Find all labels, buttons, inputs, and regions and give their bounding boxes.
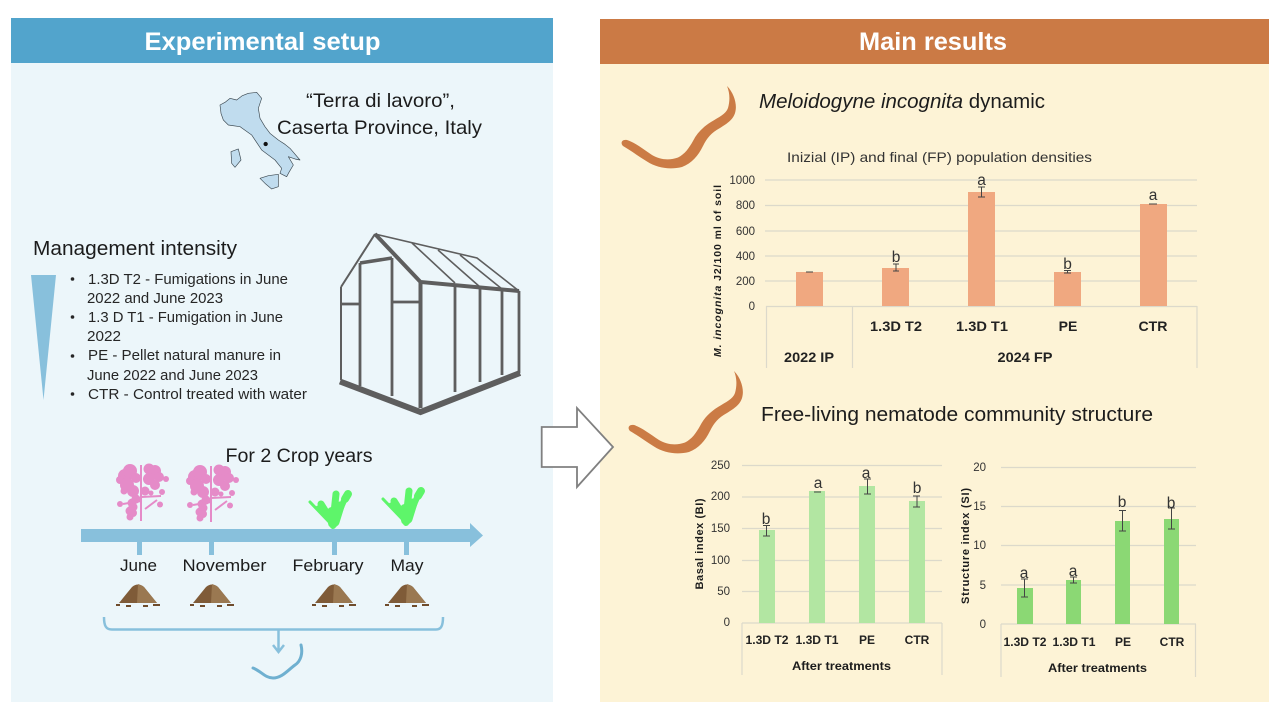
bar chart: basal index: 1.3D T1	[796, 633, 839, 647]
icon: soil sampling piles	[116, 584, 429, 606]
text: location: Caserta Province, Italy	[277, 117, 482, 139]
bar chart: basal index: 0	[724, 617, 730, 629]
bar chart: basal index: PE	[859, 633, 875, 647]
text: treatments list: 1.3D T2 - Fumigations in June	[88, 272, 288, 288]
bar chart: M. incognita densities: 1.3D T2	[870, 318, 922, 334]
bar chart: structure index: 5	[980, 580, 986, 592]
bar chart: basal index: CTR	[905, 633, 930, 647]
text: treatments list: June 2022 and June 2023	[87, 368, 258, 384]
heading: free-living nematodes: Free-living nematode community structure	[761, 404, 1153, 426]
icon: greenhouse	[340, 234, 520, 412]
bar chart: structure index: Structure index (SI)	[960, 488, 972, 604]
bar chart: structure index: 15	[973, 501, 986, 513]
heading: crop years: For 2 Crop years	[226, 446, 372, 467]
bar chart: basal index: After treatments	[792, 659, 891, 673]
bar chart: M. incognita densities: 1.3D T1	[956, 318, 1008, 334]
icon: intensity wedge	[31, 275, 56, 400]
arrow: timeline	[81, 523, 483, 555]
bar chart: basal index: b	[762, 511, 770, 528]
bar chart: structure index: 1.3D T2	[1004, 635, 1047, 649]
bar chart: structure index: 10	[973, 540, 986, 552]
heading: experimental setup	[11, 18, 553, 63]
bar chart: basal index	[694, 460, 942, 675]
text: treatments list: 1.3 D T1 - Fumigation in June	[88, 310, 283, 326]
bar chart: structure index: 0	[980, 619, 986, 631]
bar chart: M. incognita densities: 2024 FP	[998, 349, 1052, 365]
bar chart: basal index: 100	[711, 555, 730, 567]
text: treatments list: CTR - Control treated with water	[88, 387, 307, 403]
bar chart: structure index: 1.3D T1	[1052, 635, 1096, 649]
bar chart: structure index: CTR	[1160, 635, 1185, 649]
bar chart: M. incognita densities: b	[1063, 256, 1072, 273]
text: months: November	[182, 556, 267, 575]
bar chart: structure index: a	[1069, 563, 1078, 580]
bar chart: M. incognita densities: 1000	[729, 175, 755, 187]
heading: main results: Main results	[859, 28, 1007, 56]
bar chart: M. incognita densities: b	[892, 249, 900, 266]
bar chart: basal index: Basal index (BI)	[694, 498, 706, 590]
text: treatments list: 2022 and June 2023	[87, 291, 223, 307]
heading: experimental setup: Experimental setup	[144, 28, 380, 56]
text: treatments list: 2022	[87, 329, 121, 345]
text: location	[277, 90, 482, 139]
panel: main results	[600, 19, 1269, 702]
bar chart: structure index: b	[1118, 494, 1126, 511]
text: months: June	[120, 556, 157, 575]
bar chart: M. incognita densities: PE	[1059, 318, 1077, 334]
panel: experimental setup	[11, 18, 553, 702]
text: months: May	[390, 556, 424, 575]
text: months	[120, 556, 424, 575]
text: treatments list: PE - Pellet natural manure in	[88, 348, 281, 364]
bar chart: M. incognita densities: a	[1149, 187, 1158, 204]
bar chart: structure index: b	[1167, 495, 1175, 512]
bar chart: M. incognita densities: 400	[736, 251, 755, 263]
bar chart: basal index: 150	[711, 523, 730, 535]
bar chart: structure index: a	[1020, 565, 1029, 582]
bar chart: basal index: a	[814, 475, 823, 492]
heading: management intensity: Management intensity	[33, 238, 237, 260]
icon: nematode 2	[629, 371, 743, 453]
bar chart: M. incognita densities: CTR	[1138, 318, 1168, 334]
bar chart: M. incognita densities: 800	[736, 200, 755, 212]
bar chart: M. incognita densities: 0	[749, 301, 755, 313]
bar chart: basal index: b	[913, 480, 921, 497]
icon: nematode 1	[622, 86, 736, 168]
bracket and arrow to nematode	[104, 617, 443, 652]
bar chart: M. incognita densities: 600	[736, 226, 755, 238]
heading: main results	[600, 19, 1269, 64]
bar chart: M. incognita densities: 2022 IP	[784, 349, 834, 365]
bar chart: M. incognita densities	[712, 172, 1197, 368]
icon: blue nematode	[253, 645, 302, 678]
icon: map of Italy	[220, 92, 300, 189]
bar chart: structure index: After treatments	[1048, 661, 1147, 675]
bar chart: M. incognita densities: a	[977, 172, 986, 189]
icon: tomato plants	[116, 464, 239, 522]
text: months: February	[292, 556, 364, 575]
text: location: “Terra di lavoro”,	[306, 90, 455, 112]
bar chart: basal index: 200	[711, 491, 730, 503]
arrow: from setup to results	[542, 408, 613, 487]
text: treatments list	[71, 272, 307, 403]
bar chart: basal index: 250	[711, 460, 730, 472]
icon: lettuce sprigs	[310, 491, 421, 526]
bar chart: basal index: 1.3D T2	[746, 633, 789, 647]
bar chart: structure index: 20	[973, 462, 986, 474]
bar chart: basal index: a	[862, 465, 871, 482]
bar chart: structure index: PE	[1115, 635, 1131, 649]
bar chart: M. incognita densities: M. incognita J2/100 ml of soil	[712, 185, 724, 357]
bar chart: structure index	[960, 462, 1196, 677]
heading: chart title: Inizial (IP) and final (FP) population densities	[787, 149, 1092, 165]
heading: Meloidogyne incognita dynamic: Meloidogyne incognita dynamic	[759, 90, 1045, 113]
bar chart: basal index: 50	[717, 586, 730, 598]
bar chart: M. incognita densities: 200	[736, 276, 755, 288]
